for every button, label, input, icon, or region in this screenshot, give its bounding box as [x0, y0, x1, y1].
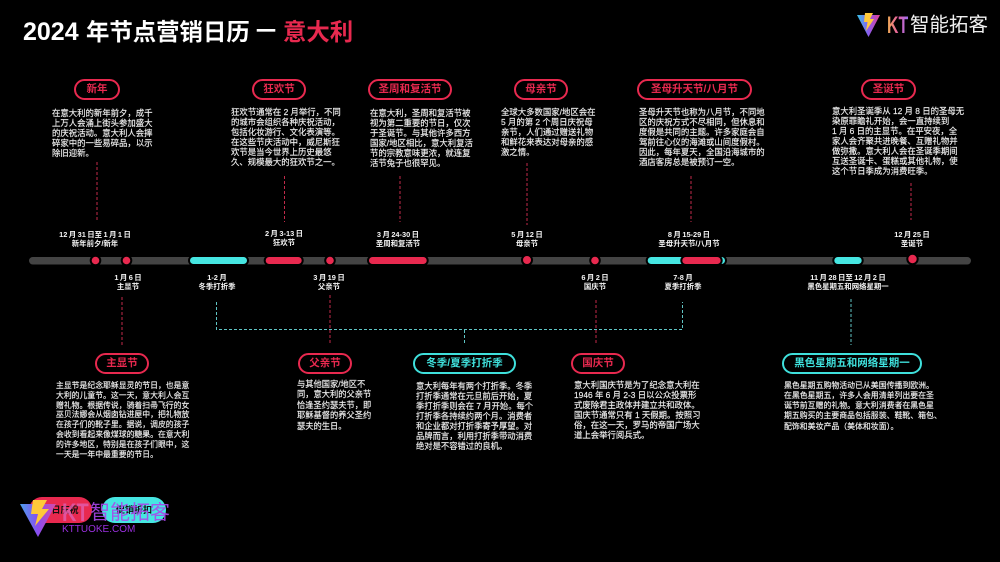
date label: 父亲节 — [313, 272, 345, 291]
panel: 主显节: 的许多地区，特别是在孩子们眼中，这 — [56, 440, 189, 449]
date label: 圣诞节: 12 月 25 日 — [894, 230, 930, 238]
panel: 圣诞节: 做弥撒。意大利人会在圣诞季期间 — [832, 146, 958, 156]
date label: 国庆节: 6 月 2 日 — [581, 272, 609, 282]
panel: 圣母升天节/八月节: 度假是共同的主题。许多家庭会自 — [639, 127, 765, 137]
title: 一 — [256, 21, 276, 43]
logo: watermark name: KT — [62, 499, 89, 527]
date label: 黑色星期五和网络星期一 — [807, 272, 889, 291]
panel: 冬季/夏季打折季: 和企业都对打折季寄予厚望。对 — [416, 421, 532, 431]
panel: 母亲节: 亲节，人们通过赠送礼物 — [501, 127, 593, 137]
panel: 圣诞节: 家人会齐聚共进晚餐、互赠礼物并 — [832, 136, 958, 146]
panel: 母亲节: 5 月的第 2 个周日庆祝母 — [501, 117, 593, 127]
panel: 狂欢节: 欢节是当今世界上历史最悠 — [231, 147, 332, 157]
panel: 新年: 除旧迎新。 — [52, 148, 94, 158]
logo: top right brand: 智能拓客 — [910, 14, 988, 36]
panel: 黑色星期五和网络星期一: 期五购买的主要商品包括服装、鞋靴、箱包、 — [784, 411, 942, 420]
panel: 黑色星期五和网络星期一: 在黑色星期五，许多人会用清单列出要在圣 — [784, 391, 934, 400]
panel: 母亲节 — [501, 79, 596, 157]
date label: 圣诞节: 圣诞节 — [901, 239, 923, 248]
date label: 国庆节: 国庆节 — [584, 282, 606, 291]
date label: 圣周和复活节 — [376, 230, 420, 248]
logo: watermark url: KTTUOKE.COM — [62, 524, 135, 535]
panel: 父亲节: 与其他国家/地区不 — [297, 380, 365, 389]
panel: 狂欢节: 的城市会组织各种庆祝活动， — [231, 117, 340, 127]
logo: top right brand: KT — [887, 12, 908, 39]
panel: 冬季/夏季打折季: 品牌而言，利用打折季带动消费 — [416, 431, 532, 441]
panel: 狂欢节: 狂欢节 — [263, 83, 295, 95]
date label: 冬季打折季: 冬季打折季 — [199, 282, 235, 291]
panel: 黑色星期五和网络星期一 — [782, 353, 942, 431]
panel: 国庆节: 意大利国庆节是为了纪念意大利在 — [574, 380, 700, 390]
panel: 国庆节 — [571, 353, 701, 440]
panel: 新年: 上万人会涌上街头参加盛大 — [52, 118, 152, 128]
panel: 圣周和复活节: 于圣诞节。与其他许多西方 — [370, 128, 470, 138]
panel: 国庆节: 国庆节通常只有 1 天假期。按照习 — [574, 410, 701, 420]
date label: 黑色星期五和网络星期一: 11 月 28 日至 12 月 2 日 — [810, 272, 886, 282]
panel: 圣母升天节/八月节: 因此，每年夏天，全国沿海城市的 — [639, 147, 765, 157]
panel: 国庆节: 道上会举行阅兵式。 — [574, 430, 649, 440]
date label: 狂欢节 — [265, 229, 303, 247]
panel: 父亲节: 耶稣基督的养父圣约 — [297, 411, 371, 420]
logo: watermark triangle — [20, 500, 56, 537]
date label: 国庆节 — [581, 272, 609, 291]
panel: 冬季/夏季打折季: 冬季/夏季打折季 — [426, 357, 503, 369]
panel: 国庆节: 俗，在这一天，罗马的帝国广场大 — [574, 420, 700, 430]
panel: 圣母升天节/八月节: 区的庆祝方式不尽相同，但休息和 — [639, 117, 765, 127]
date label: 夏季打折季 — [664, 272, 702, 291]
date label: 狂欢节: 狂欢节 — [273, 238, 295, 247]
panel: 圣诞节: 这个节日季成为消费旺季。 — [832, 166, 932, 176]
panel: 母亲节: 和鲜花来表达对母亲的感 — [501, 137, 593, 147]
panel: 新年: 新年 — [86, 83, 108, 95]
panel: 母亲节: 母亲节 — [525, 83, 557, 95]
date label: 冬季打折季 — [198, 272, 236, 291]
date label: 母亲节 — [511, 230, 543, 248]
panel: 圣周和复活节: 在意大利，圣周和复活节被 — [370, 108, 470, 118]
date label: 圣周和复活节: 圣周和复活节 — [376, 239, 420, 248]
panel: 主显节: 赠礼物。根据传说，骑着扫帚飞行的女 — [56, 401, 189, 410]
title: 2024 — [23, 18, 79, 46]
panel: 圣周和复活节 — [368, 79, 473, 168]
legend pill: 促销季 — [102, 497, 166, 523]
panel: 父亲节: 恰逢圣约瑟夫节，即 — [297, 401, 371, 410]
logo: watermark name: 智能拓客 — [90, 502, 170, 524]
panel: 黑色星期五和网络星期一: 黑色星期五购物活动已从美国传播到欧洲。 — [784, 381, 934, 390]
panel: 圣周和复活节: 国家/地区相比，意大利复活 — [370, 138, 473, 148]
date label: 母亲节: 母亲节 — [516, 239, 538, 248]
date label: 夏季打折季: 7-8 月 — [673, 272, 693, 282]
panel: 圣母升天节/八月节: 圣母升天节也称为八月节，不同地 — [639, 107, 765, 117]
panel: 圣诞节: 意大利圣诞季从 12 月 8 日的圣母无 — [832, 106, 964, 116]
title — [23, 18, 353, 46]
panel: 狂欢节 — [231, 79, 341, 167]
panel: 冬季/夏季打折季: 打折季通常在元旦前后开始，夏 — [416, 391, 532, 401]
panel: 黑色星期五和网络星期一: 配饰和美妆产品（美体和妆面）。 — [784, 422, 898, 431]
panel: 国庆节: 国庆节 — [582, 357, 614, 369]
panel: 圣母升天节/八月节: 圣母升天节/八月节 — [651, 83, 738, 95]
date label: 父亲节: 父亲节 — [318, 282, 340, 291]
panel: 父亲节: 同，意大利的父亲节 — [297, 390, 371, 399]
legend pill: 促销季: 促销折扣 — [116, 505, 152, 515]
date label: 新年 — [59, 230, 131, 248]
date label: 圣母升天节 — [658, 230, 720, 248]
panel: 狂欢节: 在这些节庆活动中，威尼斯狂 — [231, 137, 340, 147]
panel: 国庆节: 式废除君主政体并建立共和政体。 — [574, 400, 700, 410]
date label: 圣诞节 — [894, 230, 930, 248]
logo: watermark name — [62, 499, 170, 527]
panel: 圣周和复活节: 圣周和复活节 — [378, 83, 442, 95]
panel: 主显节: 一天是一年中最重要的节日。 — [56, 450, 158, 459]
panel: 冬季/夏季打折季: 绝对是不容错过的良机。 — [416, 441, 507, 451]
panel: 圣母升天节/八月节: 酒店客房总是被预订一空。 — [639, 157, 740, 167]
date label: 冬季打折季: 1-2 月 — [207, 272, 227, 282]
panel: 主显节: 巫贝法娜会从烟囱钻进屋中，把礼物放 — [56, 410, 189, 419]
panel: 国庆节: 1946 年 6 月 2-3 日以公众投票形 — [574, 390, 696, 400]
legend pill: 节日 — [29, 497, 92, 523]
date label: 黑色星期五和网络星期一: 黑色星期五和网络星期一 — [807, 282, 889, 291]
panel: 狂欢节: 久、规模最大的狂欢节之一。 — [231, 157, 340, 167]
panel: 新年: 的庆祝活动。意大利人会摔 — [52, 128, 152, 138]
date label: 夏季打折季: 夏季打折季 — [665, 282, 701, 291]
panel: 圣周和复活节: 节的宗教意味更浓，就连复 — [370, 148, 470, 158]
panel: 父亲节 — [297, 353, 371, 431]
date label: 主显节: 1 月 6 日 — [114, 272, 142, 282]
panel: 父亲节: 瑟夫的生日。 — [297, 422, 346, 431]
date label: 圣周和复活节: 3 月 24-30 日 — [377, 230, 419, 238]
legend: 节日 and 促销季 pills with watermark — [20, 497, 170, 537]
panel: 冬季/夏季打折季: 季打折季则会在 7 月开始。每个 — [416, 401, 533, 411]
date label: 主显节: 主显节 — [117, 282, 139, 291]
date label: 母亲节: 5 月 12 日 — [511, 230, 543, 239]
panel: 黑色星期五和网络星期一: 黑色星期五和网络星期一 — [794, 357, 910, 369]
panel: 黑色星期五和网络星期一: 诞节前互赠的礼物。意大利消费者在黑色星 — [784, 401, 934, 410]
panel: 母亲节: 全球大多数国家/地区会在 — [501, 107, 595, 117]
panel: 圣周和复活节: 视为第二重要的节日，仅次 — [370, 118, 470, 128]
panel: 圣诞节: 染原罪瞻礼开始，会一直持续到 — [832, 116, 949, 126]
date label: 圣母升天节: 8 月 15-29 日 — [668, 230, 710, 238]
date label: 父亲节: 3 月 19 日 — [313, 272, 345, 282]
panel: 冬季/夏季打折季: 意大利每年有两个打折季。冬季 — [416, 381, 532, 391]
panel: 圣周和复活节: 活节兔子也很罕见。 — [370, 158, 445, 168]
panel: 主显节: 主显节 — [106, 357, 138, 369]
date label: 主显节 — [114, 272, 142, 291]
panel: 主显节 — [56, 353, 190, 459]
panel: 狂欢节: 狂欢节通常在 2 月举行，不同 — [231, 107, 341, 117]
date label: 新年: 12 月 31 日至 1 月 1 日 — [59, 230, 131, 238]
panel: 冬季/夏季打折季 — [413, 353, 533, 451]
panel: 狂欢节: 包括化妆游行、文化表演等。 — [231, 127, 340, 137]
panel: 新年: 碎家中的一些易碎品，以示 — [52, 138, 152, 148]
legend pill: 节日: 节日庆祝 — [42, 505, 78, 515]
panel: 主显节: 大利的儿童节。这一天，意大利人会互 — [56, 391, 189, 400]
panel: 圣母升天节/八月节: 驾前往心仪的海滩或山间度假村。 — [639, 137, 765, 147]
panel: 圣诞节 — [832, 79, 964, 176]
panel: 圣诞节: 圣诞节 — [873, 83, 904, 95]
panel: 母亲节: 激之情。 — [501, 147, 534, 157]
panel: 新年 — [52, 79, 152, 158]
panel: 父亲节: 父亲节 — [309, 357, 341, 369]
panel: 圣诞节: 1 月 6 日的主显节。在平安夜，全 — [832, 126, 957, 136]
panel: 新年: 在意大利的新年前夕，成千 — [52, 108, 152, 118]
panel: 主显节: 会收到看起来像煤球的糖果。在意大利 — [56, 430, 189, 439]
panel: 冬季/夏季打折季: 打折季各持续约两个月。消费者 — [416, 411, 532, 421]
panel: 圣母升天节/八月节 — [637, 79, 765, 167]
date label: 狂欢节: 2 月 3-13 日 — [265, 229, 303, 238]
date label: 新年: 新年前夕/新年 — [72, 239, 118, 248]
title: 年节点营销日历 — [86, 19, 250, 45]
logo: top right brand — [857, 12, 988, 39]
panel: 圣诞节: 互送圣诞卡、蛋糕或其他礼物，使 — [832, 156, 958, 166]
title: 意大利 — [283, 19, 353, 45]
panel: 主显节: 主显节是纪念耶稣显灵的节日，也是意 — [56, 381, 189, 390]
panel: 主显节: 在孩子们的靴子里。据说，调皮的孩子 — [56, 420, 189, 429]
date label: 圣母升天节: 圣母升天节/八月节 — [658, 239, 720, 248]
